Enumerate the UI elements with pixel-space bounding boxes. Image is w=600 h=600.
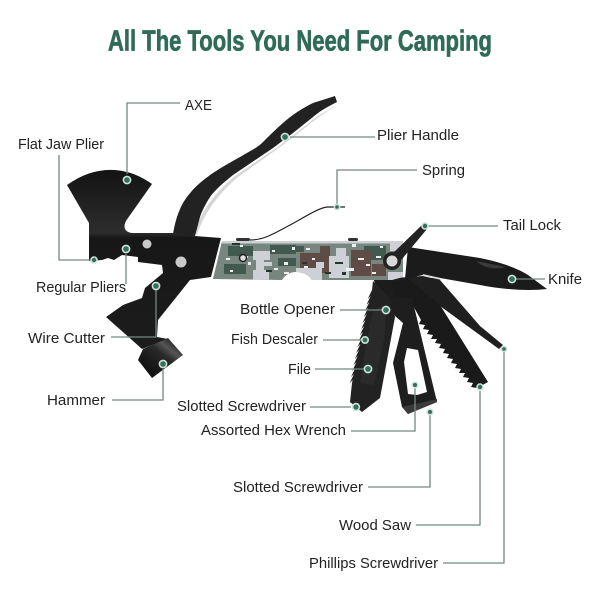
label: File: File: [288, 362, 311, 378]
label: Slotted Screwdriver (upper): Slotted Screwdriver: [177, 399, 306, 415]
multitool illustration: [67, 96, 547, 414]
spring: [250, 207, 345, 240]
label: Hammer: Hammer: [47, 393, 105, 409]
label: Spring: [334, 163, 465, 210]
label: Regular Pliers: Regular Pliers: [36, 280, 126, 296]
label: AXE: AXE: [185, 98, 212, 114]
label: Slotted Screwdriver (upper): [177, 399, 359, 415]
axe and regular plier jaw: [67, 170, 221, 349]
label: Wire Cutter: Wire Cutter: [28, 331, 105, 347]
plier handle: [173, 96, 337, 236]
tool: file and fish descaler: [350, 281, 395, 412]
label: Phillips Screwdriver: [309, 346, 507, 572]
label: Wood Saw: Wood Saw: [339, 518, 412, 534]
label: File: [288, 362, 372, 378]
camouflage handle: [213, 241, 403, 280]
handle screw: [240, 254, 246, 262]
label: Plier Handle: [281, 128, 459, 144]
label: Bottle Opener: Bottle Opener: [240, 302, 335, 318]
hammer head: [138, 338, 183, 378]
label: Knife: Knife: [548, 272, 582, 288]
knife lower edge highlight: [423, 275, 441, 279]
label: Hammer: [47, 360, 167, 409]
file surface texture: [360, 305, 387, 385]
label: Flat Jaw Plier: Flat Jaw Plier: [18, 137, 104, 153]
handle top nubs: [236, 238, 358, 241]
pivot rivets: [142, 240, 186, 268]
tool: knife blade: [405, 247, 547, 290]
label: Bottle Opener: [240, 302, 390, 318]
label: Fish Descaler: [231, 332, 368, 348]
tool: wood saw: [392, 279, 488, 388]
tool: phillips screwdriver: [395, 276, 503, 349]
label: Knife: [508, 272, 582, 288]
tail lock pivot cap: [386, 256, 398, 266]
hex wrench bevel: [402, 399, 437, 414]
title: All The Tools You Need For Camping: [108, 26, 492, 58]
label: Fish Descaler: Fish Descaler: [231, 332, 318, 348]
tail lock pivot: [383, 252, 401, 270]
tail lock lever: [389, 225, 427, 265]
label: Phillips Screwdriver: Phillips Screwdriver: [309, 556, 438, 572]
tool base under handle: [373, 278, 440, 300]
label: Wood Saw: [339, 384, 483, 534]
label: Assorted Hex Wrench: [201, 382, 418, 439]
label: Slotted Screwdriver (lower): [233, 409, 433, 496]
label: Plier Handle: Plier Handle: [377, 128, 459, 144]
knife thumb slot: [476, 261, 506, 268]
label: Regular Pliers: [36, 245, 130, 296]
label: Flat Jaw Plier: [18, 137, 104, 263]
label: Tail Lock: [422, 218, 562, 234]
label: Spring: Spring: [422, 163, 465, 179]
label: Assorted Hex Wrench: Assorted Hex Wrench: [201, 423, 346, 439]
label: Tail Lock: Tail Lock: [503, 218, 562, 234]
tool: hex wrench: [383, 297, 437, 414]
label: AXE: [123, 98, 212, 184]
label: Slotted Screwdriver (lower): Slotted Screwdriver: [233, 480, 363, 496]
plier handle shadow: [195, 103, 339, 235]
label: Wire Cutter: [28, 282, 160, 347]
